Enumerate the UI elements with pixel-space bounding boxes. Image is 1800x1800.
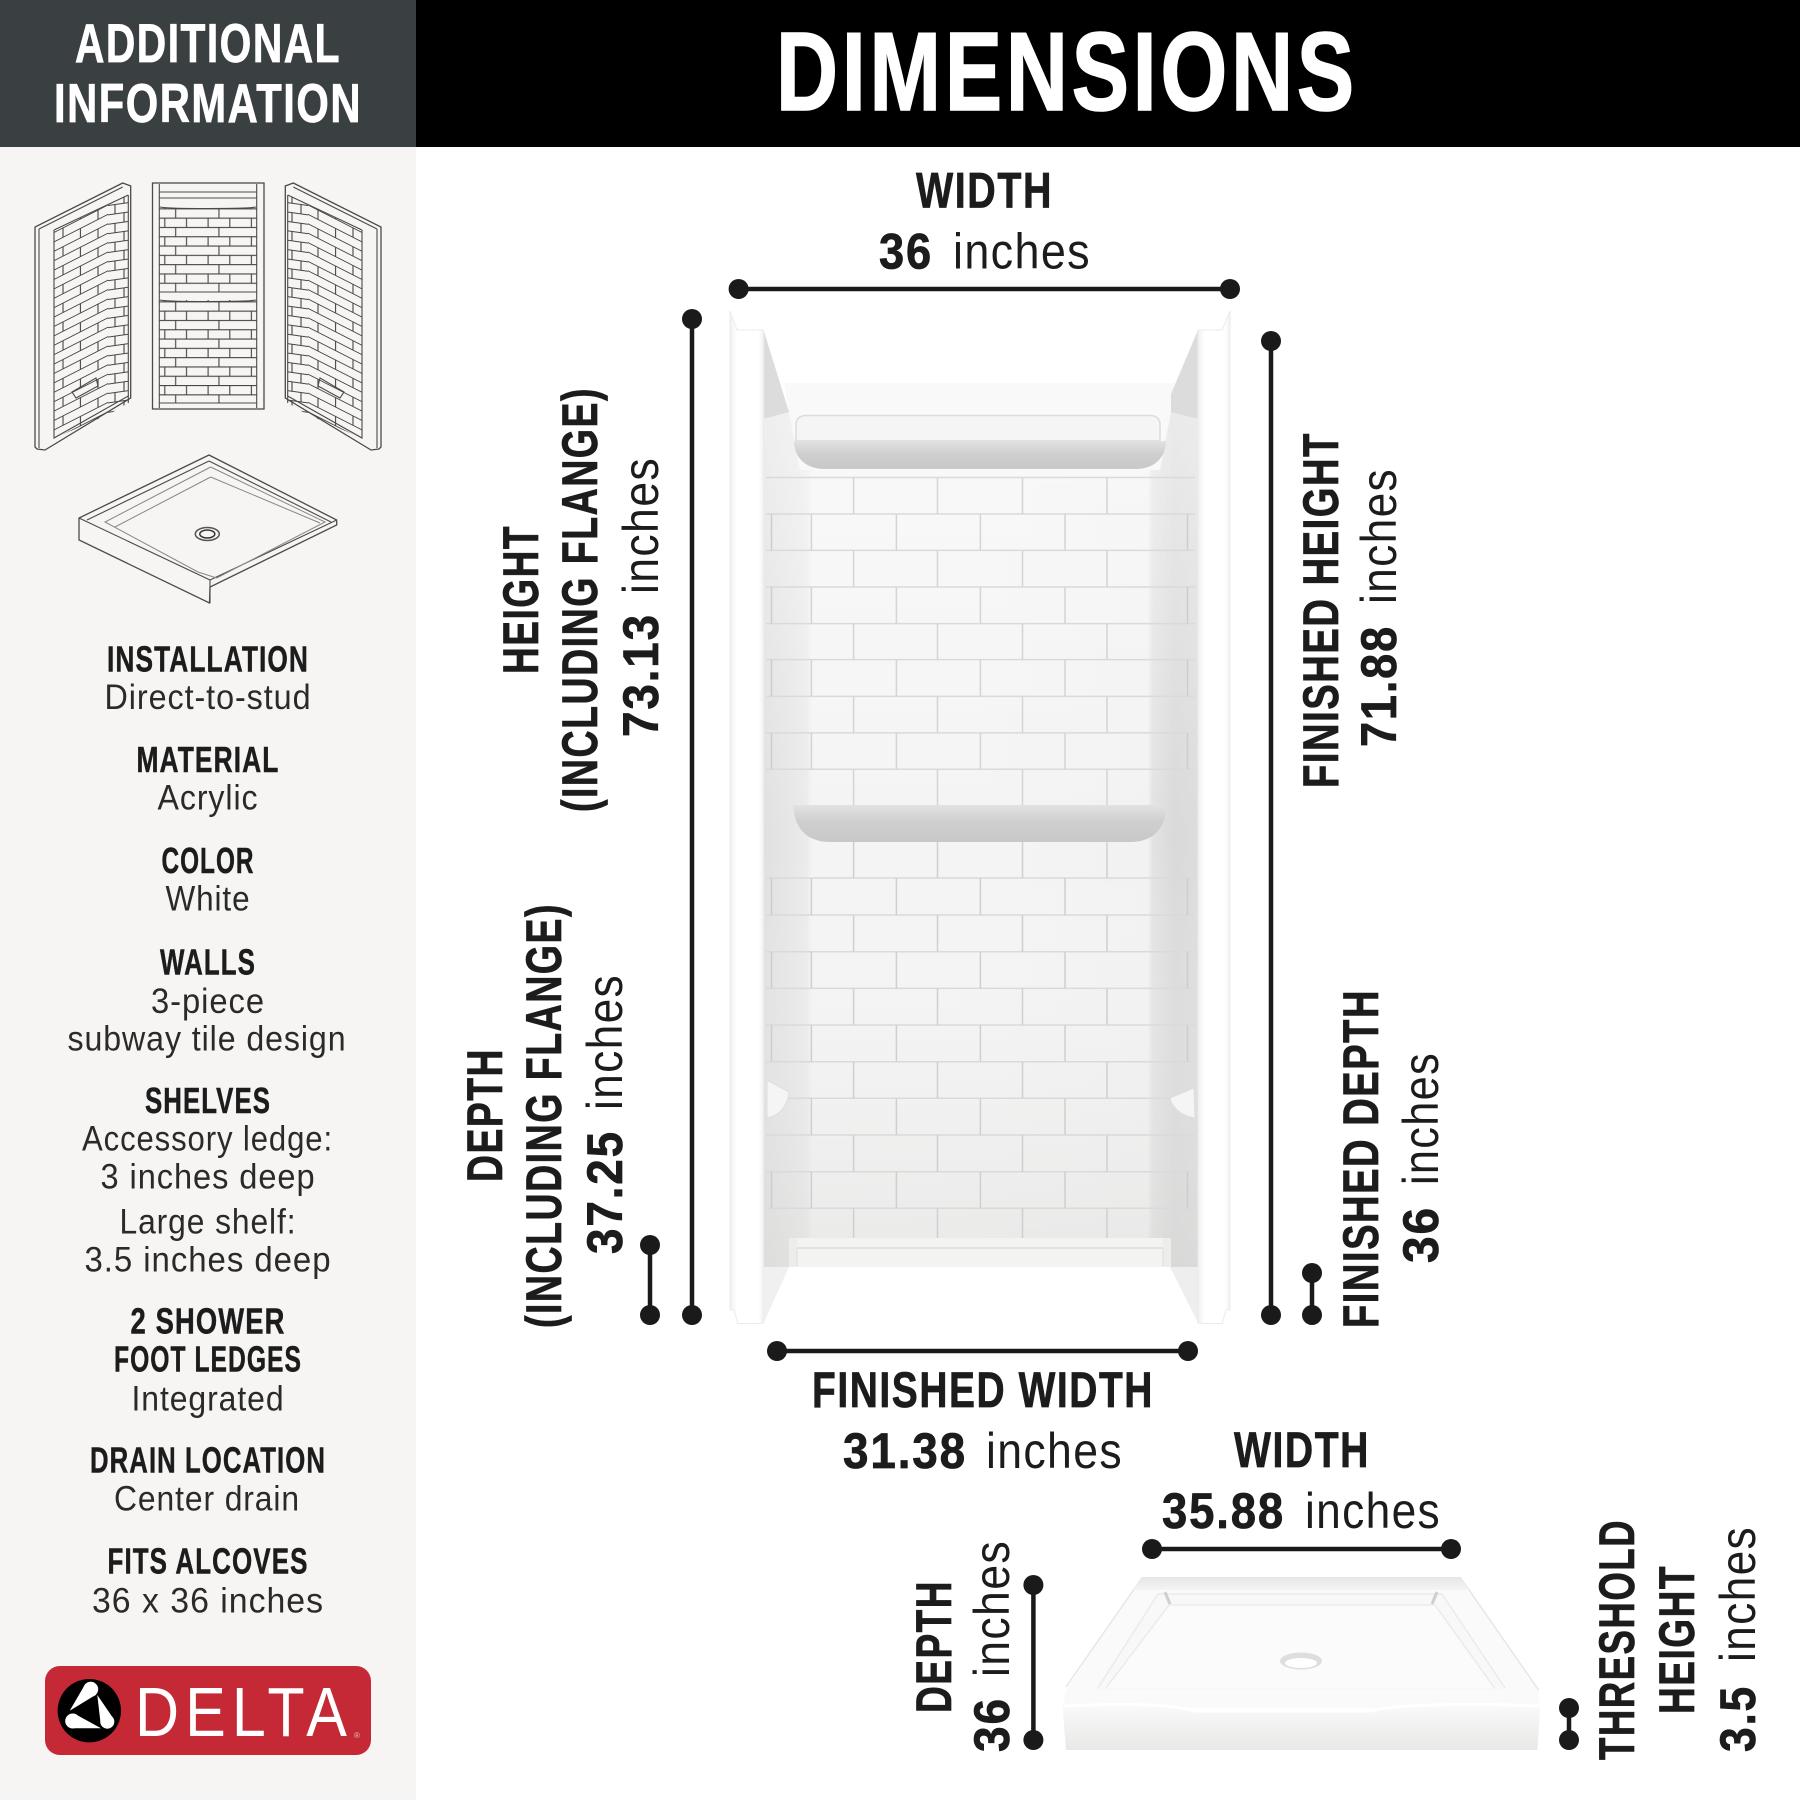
spec: fits alcoves: 36 x 36 inches [92, 1581, 324, 1620]
title banner: DIMENSIONS [776, 10, 1358, 134]
spec: material: MATERIAL [136, 739, 280, 780]
back wall with tile [763, 383, 1198, 1267]
dimension: base width: inches [1305, 1483, 1441, 1539]
spec: shelves: Large shelf: [120, 1202, 296, 1241]
dimension: finished height [1261, 331, 1407, 1325]
logo: Delta: DELTA [135, 1673, 353, 1751]
logo: Delta: ® [354, 1731, 360, 1740]
upper accessory shelf [794, 441, 1166, 469]
spec: shelves: 3 inches deep [100, 1157, 316, 1196]
base front [1063, 1704, 1540, 1750]
spec: shower foot ledges: 2 SHOWER [130, 1300, 286, 1342]
spec: shower foot ledges: FOOT LEDGES [114, 1338, 302, 1380]
dimension: width: inches [953, 224, 1091, 280]
shower base photo [1063, 1577, 1540, 1750]
right flange [1198, 311, 1230, 1324]
dimension: finished width [767, 1341, 1198, 1479]
spec: color: COLOR [162, 840, 254, 881]
title banner [416, 0, 1800, 147]
spec: drain location: DRAIN LOCATION [90, 1440, 326, 1480]
spec: walls [68, 942, 346, 1058]
dimension: height including flange: HEIGHT [493, 525, 549, 674]
dimension: finished depth: 36 [1393, 1206, 1449, 1263]
dimension: threshold height [1559, 1519, 1766, 1760]
return right bottom [1170, 1267, 1198, 1323]
dimension: base width: WIDTH [1234, 1422, 1370, 1478]
dimension: height including flange: 73.13 [613, 613, 669, 737]
dimension: depth including flange: inches [577, 974, 633, 1110]
spec: shower foot ledges: Integrated [132, 1379, 284, 1418]
return left top [764, 330, 789, 418]
spec: fits alcoves: FITS ALCOVES [108, 1540, 308, 1582]
header: additional information: INFORMATION [54, 72, 362, 134]
header: additional information: ADDITIONAL [75, 12, 341, 74]
spec: shelves: Accessory ledge: [82, 1119, 333, 1158]
dimension: finished width: FINISHED WIDTH [812, 1362, 1154, 1418]
spec: installation: INSTALLATION [107, 638, 309, 680]
foot ledge right [1170, 1088, 1195, 1118]
dimension: base width [1142, 1422, 1461, 1559]
icon: left wall line drawing [35, 183, 131, 450]
spec: color: White [166, 879, 250, 918]
spec: fits alcoves [92, 1540, 324, 1620]
spec: walls: WALLS [160, 942, 256, 982]
dimension: depth including flange: 37.25 [577, 1130, 633, 1254]
base drain [1280, 1652, 1322, 1670]
spec: material: Acrylic [158, 778, 258, 817]
spec: shelves: 3.5 inches deep [84, 1240, 332, 1279]
logo: Delta [45, 1666, 371, 1755]
spec: walls: subway tile design [68, 1019, 346, 1058]
dimension: height including flange: inches [613, 457, 669, 594]
icon: right wall line drawing [285, 183, 381, 450]
dimension: height including flange [493, 309, 702, 1325]
dimension: width: WIDTH [916, 162, 1053, 218]
dimension: base depth: DEPTH [906, 1580, 962, 1713]
return right top [1171, 330, 1198, 418]
dimension: finished height: inches [1351, 468, 1407, 604]
spec: drain location [90, 1440, 326, 1518]
bottom ledge [789, 1238, 1171, 1267]
dimension: finished depth: FINISHED DEPTH [1333, 989, 1389, 1328]
dimension: finished width: inches [986, 1423, 1123, 1479]
spec: installation [104, 638, 312, 717]
foot ledge left [767, 1080, 789, 1118]
spec: shelves: SHELVES [145, 1080, 271, 1121]
base back rim [1133, 1577, 1469, 1590]
spec: walls: 3-piece [151, 982, 265, 1021]
dimension: threshold height: inches [1710, 1526, 1766, 1662]
left flange [730, 311, 764, 1324]
dimension: base width: 35.88 [1162, 1483, 1285, 1539]
dimension: finished height: FINISHED HEIGHT [1293, 432, 1349, 788]
dimension: threshold height: HEIGHT [1649, 1565, 1705, 1714]
return left bottom [764, 1267, 789, 1323]
panel: additional information [0, 0, 416, 1800]
dimension: threshold height: 3.5 [1710, 1685, 1766, 1752]
top of upper shelf [796, 416, 1160, 441]
spec: shower foot ledges [114, 1300, 302, 1418]
shower walls photo [730, 311, 1230, 1324]
spec: drain location: Center drain [114, 1479, 300, 1518]
dimension: depth including flange [457, 903, 660, 1328]
large shelf [793, 805, 1167, 842]
dimension: finished width: 31.38 [843, 1423, 967, 1479]
spec: shelves [82, 1080, 333, 1279]
icon: shower base line drawing [79, 455, 337, 603]
dimension: base depth: inches [964, 1540, 1020, 1677]
dimension: width [729, 162, 1240, 299]
spec: color [162, 840, 254, 918]
dimension: width: 36 [879, 224, 933, 280]
dimension: threshold height: THRESHOLD [1589, 1519, 1645, 1760]
dimension: finished depth: inches [1393, 1052, 1449, 1185]
base inner basin [1094, 1592, 1508, 1690]
dimension: finished depth [1302, 989, 1449, 1328]
dimension: base depth [906, 1540, 1043, 1752]
spec: material [136, 739, 280, 817]
dimension: depth including flange: (INCLUDING FLANGE) [516, 903, 572, 1328]
dimension: base depth: 36 [964, 1697, 1020, 1752]
spec: installation: Direct-to-stud [104, 678, 312, 717]
dimension: depth including flange: DEPTH [457, 1048, 513, 1182]
icon: centre wall line drawing [152, 183, 264, 409]
header: additional information [0, 0, 416, 147]
dimension: height including flange: (INCLUDING FLANGE) [552, 387, 608, 812]
dimension: finished height: 71.88 [1351, 625, 1407, 747]
